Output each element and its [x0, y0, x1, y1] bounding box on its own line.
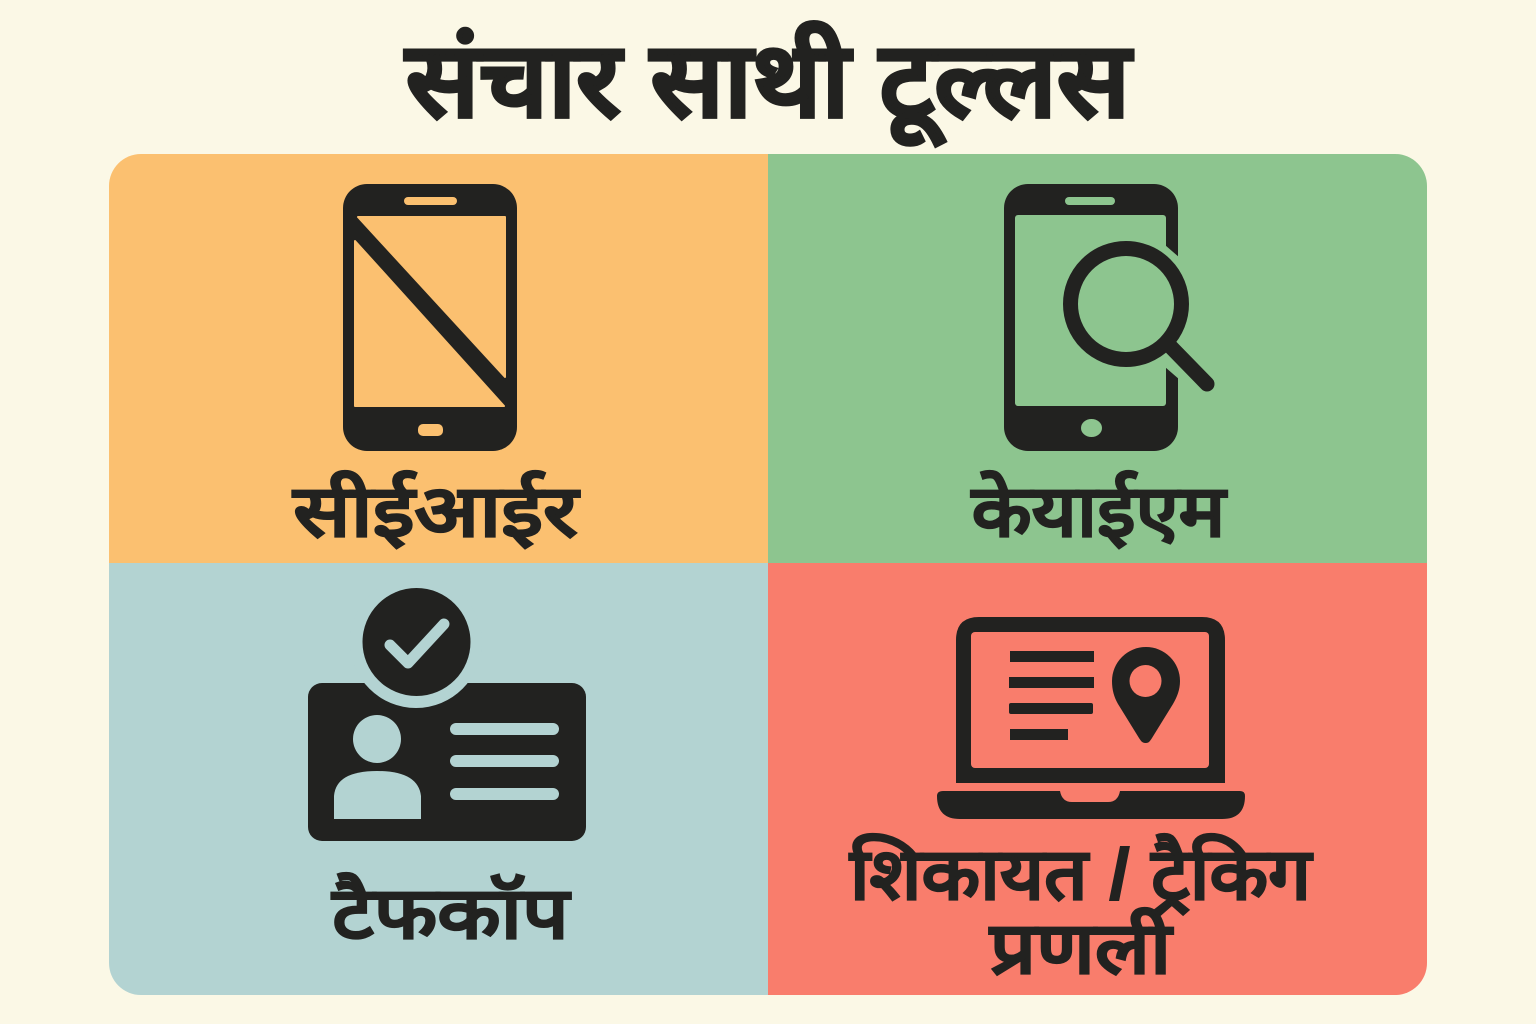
label: TAFCOP: टैफकॉप [332, 874, 569, 954]
panel grid [109, 154, 1427, 995]
label: CEIR: सीईआईर [293, 472, 578, 552]
label: complaint tracking system: प्रणली [990, 909, 1171, 989]
label: complaint tracking system [848, 832, 1314, 989]
quadrant backgrounds [109, 154, 1427, 995]
label: KYM: केयाईएम [972, 472, 1225, 552]
icon: phone with magnifier [1004, 184, 1207, 451]
icon: verified id card [308, 576, 586, 841]
icon: blocked phone [343, 184, 517, 451]
icon: laptop with location pin [937, 617, 1245, 819]
title: संचार साथी टूल्लस [406, 23, 1130, 139]
label: complaint tracking system: शिकायत / ट्रैकिग [850, 835, 1311, 915]
